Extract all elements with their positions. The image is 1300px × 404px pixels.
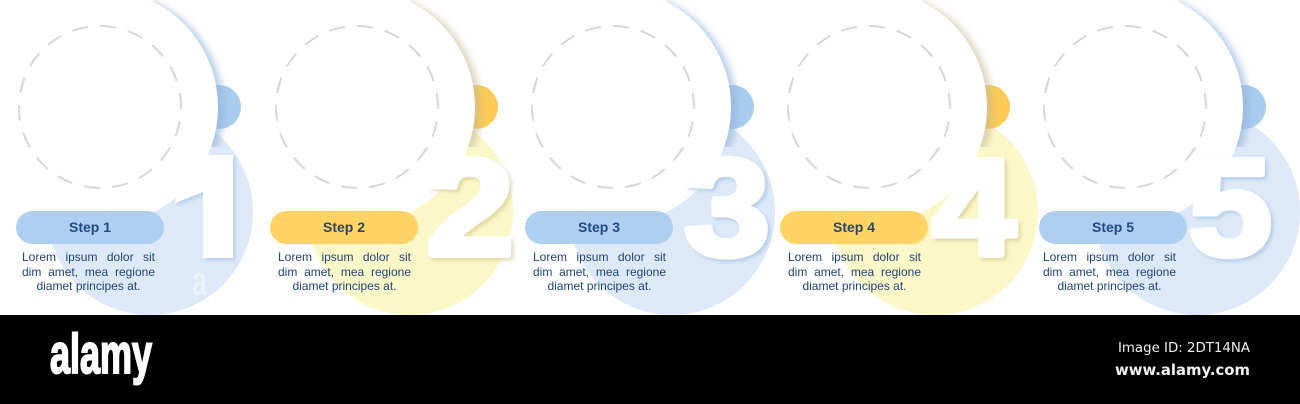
- alamy logo: alamy: [50, 322, 152, 385]
- description: step 2: dim amet, mea regione: [278, 264, 411, 278]
- dashed image placeholder: step 5: [1044, 26, 1206, 188]
- step label: step 1: Step 1: [69, 219, 111, 235]
- white circle: step 1: [47, 0, 226, 212]
- step label: step 2: [270, 211, 418, 244]
- dashed image placeholder: step 1: [19, 26, 181, 188]
- step label: step 5: [1039, 211, 1187, 244]
- description: step 4: diamet principes at.: [802, 279, 907, 293]
- description: step 3: diamet principes at.: [547, 279, 652, 293]
- panel: step 1: [16, 0, 253, 315]
- white circle: step 3: [569, 0, 740, 213]
- background circle: step 1: [47, 109, 253, 315]
- description: step 4: [788, 250, 921, 293]
- background circle: step 3: [569, 109, 775, 315]
- step label: step 5: Step 5: [1092, 219, 1134, 235]
- accent circle: step 4: [966, 85, 1010, 129]
- description: step 5: [1043, 250, 1176, 293]
- panel: step 2: [270, 0, 516, 315]
- background circle: step 2: [307, 109, 513, 315]
- accent circle: step 1: [197, 85, 241, 129]
- number 1: 1: [168, 131, 244, 285]
- description: step 5: diamet principes at.: [1057, 279, 1162, 293]
- step label: step 3: Step 3: [578, 219, 620, 235]
- white circle: step 4: [832, 0, 996, 214]
- number 5: 5: [1188, 131, 1272, 285]
- website: www.alamy.com: [1115, 361, 1250, 379]
- accent circle: step 5: [1222, 85, 1266, 129]
- panel: step 3: [525, 0, 775, 315]
- number 4: 4: [932, 131, 1016, 285]
- description: step 1: [22, 250, 155, 293]
- number 1: [175, 155, 237, 262]
- background circle: step 5: [1094, 109, 1300, 315]
- description: step 3: Lorem ipsum dolor sit: [533, 250, 666, 264]
- step label: step 1: [16, 211, 164, 244]
- panel: step 5: [1039, 0, 1300, 315]
- description: step 1: diamet principes at.: [36, 279, 141, 293]
- description: step 2: diamet principes at.: [292, 279, 397, 293]
- image id: Image ID: 2DT14NA: [1118, 340, 1251, 356]
- step label: step 4: [780, 211, 928, 244]
- white circle: step 2: [307, 0, 484, 213]
- description: step 5: Lorem ipsum dolor sit: [1043, 250, 1176, 264]
- description: step 5: dim amet, mea regione: [1043, 264, 1176, 278]
- description: step 1: dim amet, mea regione: [22, 264, 155, 278]
- description: step 3: [533, 250, 666, 293]
- step label: step 2: Step 2: [323, 219, 365, 235]
- dashed image placeholder: step 3: [532, 26, 694, 188]
- panel: step 4: [780, 0, 1038, 315]
- description: step 2: [278, 250, 411, 293]
- description: step 1: Lorem ipsum dolor sit: [22, 250, 155, 264]
- step label: step 4: Step 4: [833, 219, 875, 235]
- description: step 4: Lorem ipsum dolor sit: [788, 250, 921, 264]
- number 3: 3: [684, 131, 770, 285]
- description: step 4: dim amet, mea regione: [788, 264, 921, 278]
- accent circle: step 3: [710, 85, 754, 129]
- footer band: [0, 315, 1300, 404]
- description: step 3: dim amet, mea regione: [533, 264, 666, 278]
- description: step 2: Lorem ipsum dolor sit: [278, 250, 411, 264]
- number 2: 2: [426, 131, 514, 285]
- white circle: step 5: [1094, 0, 1250, 212]
- dashed image placeholder: step 4: [788, 26, 950, 188]
- accent circle: step 2: [454, 85, 498, 129]
- watermark letter: a: [192, 257, 207, 304]
- background circle: step 4: [832, 109, 1038, 315]
- dashed image placeholder: step 2: [276, 26, 438, 188]
- step label: step 3: [525, 211, 673, 244]
